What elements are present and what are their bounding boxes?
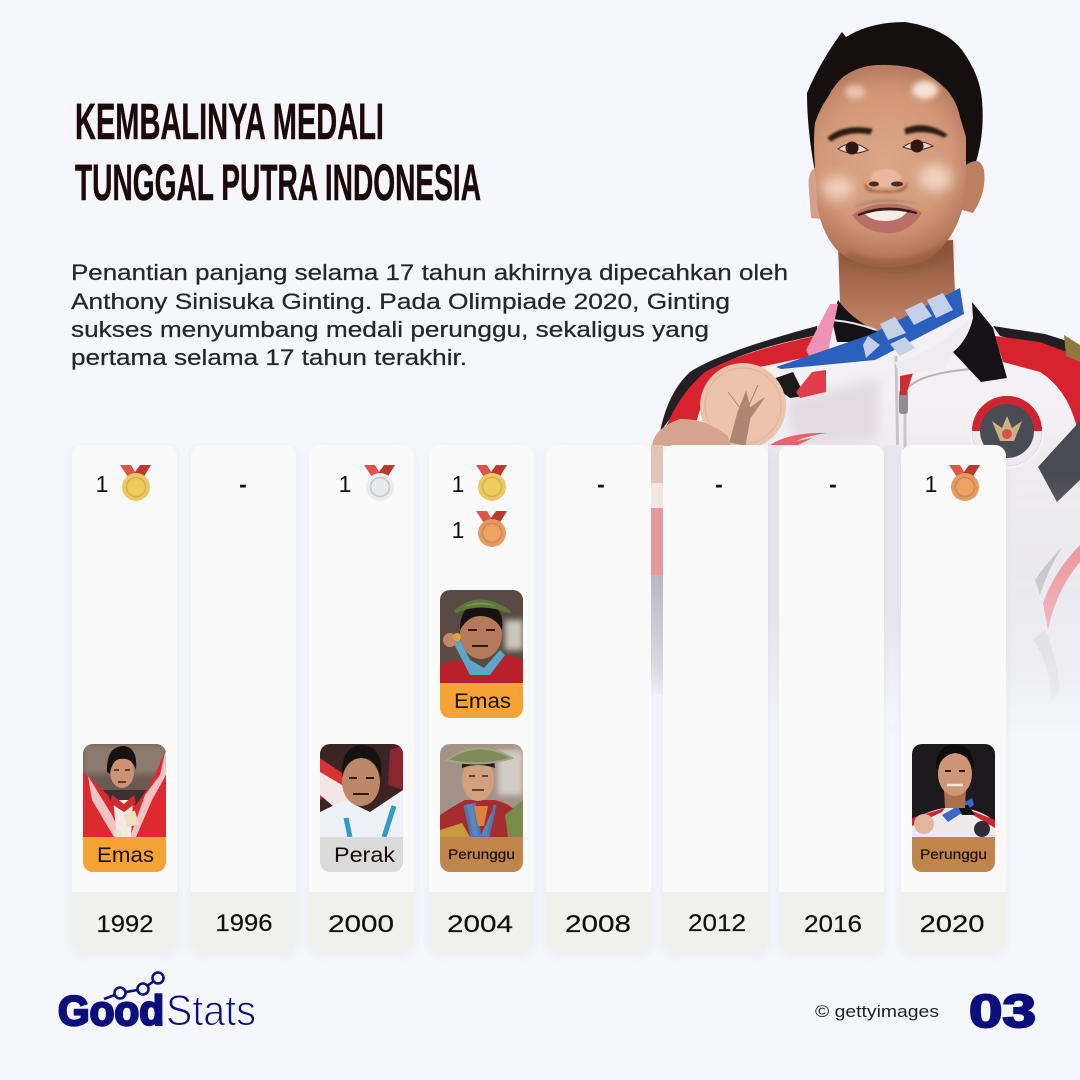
panel: medal columns by Olympic year [72,445,1006,952]
title: KEMBALINYA MEDALI [75,93,384,150]
eyes [838,142,933,153]
jacket logo swoosh [770,433,827,445]
right sleeve dark band [1038,421,1080,502]
collar black left [832,300,878,342]
card: 2004 bronze medalist [440,744,523,872]
card: 2020 bronze medalist [912,744,995,872]
ears [962,161,985,213]
logo: GoodStats [58,972,256,1035]
nose [871,169,901,187]
label: Perunggu 2004: Perunggu [448,847,515,862]
card: 2000 silver medalist [320,744,403,872]
label: Perak 2000: Perak [334,844,396,867]
ribbon checks [863,293,953,358]
column 1992 [72,445,177,952]
intro text [71,260,788,370]
year labels [96,910,984,938]
jacket right shoulder stripes [993,326,1080,352]
face [814,65,966,267]
logo: GoodStats: Good [58,987,164,1034]
label: Emas 2004: Emas [454,690,511,713]
title [75,93,481,211]
logo: GoodStats: Stats [166,987,256,1035]
year labels: 2000 [328,911,394,938]
count 2012: - [715,471,723,497]
gap strip behind columns [651,445,901,735]
badge [972,396,1042,466]
card: 1992 gold medalist [83,744,166,872]
icon: bronze medal 2004 [476,511,507,547]
hand [652,419,731,446]
mouth [852,204,922,233]
count 2008: - [597,471,605,497]
label: Emas 1992: Emas [97,844,154,867]
jacket lower streaks [1043,545,1080,630]
column 2004 [429,445,534,952]
year labels: 1996 [216,910,272,937]
page number: 03 [969,985,1036,1037]
zip [894,356,906,449]
intro text: pertama selama 17 tahun terakhir. [71,345,467,370]
count 2016: - [829,471,837,497]
count 2020: 1 [925,471,937,497]
count 2004 bronze: 1 [452,517,464,543]
label: Perunggu 2020: Perunggu [920,847,987,862]
icon: gold medal 1992 [120,465,151,501]
year labels: 2016 [804,911,862,938]
year labels: 2008 [565,911,631,938]
year labels: 1992 [96,911,154,938]
column 2000 [309,445,414,952]
count 2000: 1 [339,471,351,497]
medal counts [96,471,937,543]
intro text: Penantian panjang selama 17 tahun akhirnya dipecahkan oleh [71,260,788,285]
moustache shadow [852,199,922,208]
count 2004 gold: 1 [452,471,464,497]
photo: Anthony Ginting holding bronze medal [652,22,1080,740]
year labels: 2004 [447,911,513,938]
icon: silver medal 2000 [364,465,395,501]
jacket body [665,320,1080,676]
intro text: Anthony Sinisuka Ginting. Pada Olimpiade 2020, Ginting [71,289,730,314]
card: 2004 gold medalist [440,590,523,718]
medal [700,363,786,449]
ribbon blue [776,288,964,369]
icon: bronze medal 2020 [949,465,980,501]
face highlights [912,81,938,99]
title: TUNGGAL PUTRA INDONESIA [75,154,481,211]
year labels: 2020 [920,911,984,938]
column 2020 [901,445,1006,952]
collar white inner [895,362,913,376]
hair [807,22,983,182]
column 2008 [546,445,651,952]
image credit: © gettyimages [815,1002,939,1021]
intro text: sukses menyumbang medali perunggu, sekaligus yang [71,317,709,342]
jacket left shoulder stripes [660,326,818,432]
logo chart line [104,972,164,999]
eyebrows [828,126,947,141]
ribbon pink [806,304,838,356]
gold leaf at edge [1064,335,1080,362]
collar black right [953,302,1007,382]
neck [835,240,955,336]
column 2012 [663,445,768,952]
icon: gold medal 2004 [476,465,507,501]
year labels: 2012 [688,910,746,937]
count 1992: 1 [96,471,108,497]
column 1996 [191,445,296,952]
column 2016 [779,445,884,952]
count 1996: - [239,471,247,497]
